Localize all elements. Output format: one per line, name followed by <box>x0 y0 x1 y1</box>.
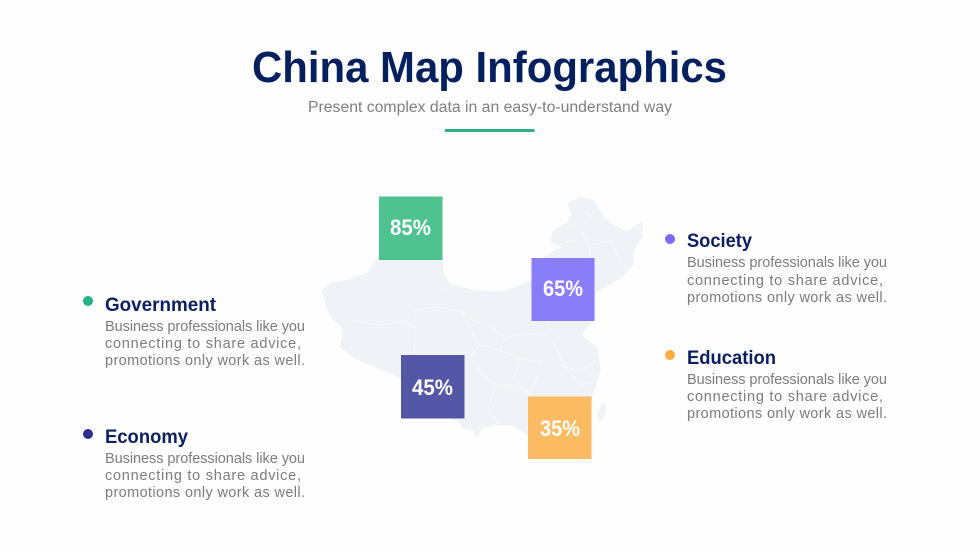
item: Society <box>665 231 887 306</box>
item: Society: Society <box>687 231 752 252</box>
item: Economy <box>83 427 305 501</box>
box: 85%: 85% <box>390 215 431 240</box>
item: Government: connecting to share advice, <box>105 336 301 352</box>
item: Economy: connecting to share advice, <box>105 468 301 484</box>
box: 35% <box>528 396 592 459</box>
title: China Map Infographics <box>252 43 727 92</box>
item: Government <box>83 295 305 369</box>
item: Education: Education <box>687 348 776 369</box>
subtitle: Present complex data in an easy-to-understand way <box>308 99 672 116</box>
item: Government: Government <box>105 295 217 316</box>
item: Economy: Business professionals like you <box>105 451 305 467</box>
item: Society: connecting to share advice, <box>687 273 883 289</box>
item: Education: Business professionals like you <box>687 372 887 388</box>
item: Society: promotions only work as well. <box>687 290 887 306</box>
map of China <box>322 198 642 436</box>
item: Education: connecting to share advice, <box>687 389 883 405</box>
box: 35%: 35% <box>540 416 580 441</box>
box: 85% <box>379 196 442 260</box>
item: Government: promotions only work as well. <box>105 353 305 369</box>
item: Economy: Economy <box>105 427 188 448</box>
title underline <box>445 129 534 132</box>
box: 65% <box>532 258 594 321</box>
box: 45% <box>401 355 464 418</box>
box: 65%: 65% <box>543 276 583 301</box>
item: Education <box>665 348 887 422</box>
item: Society: Business professionals like you <box>687 255 887 271</box>
item: Education: promotions only work as well. <box>687 406 887 422</box>
item: Economy: promotions only work as well. <box>105 485 305 501</box>
box: 45%: 45% <box>412 375 453 400</box>
item: Government: Business professionals like you <box>105 319 305 335</box>
